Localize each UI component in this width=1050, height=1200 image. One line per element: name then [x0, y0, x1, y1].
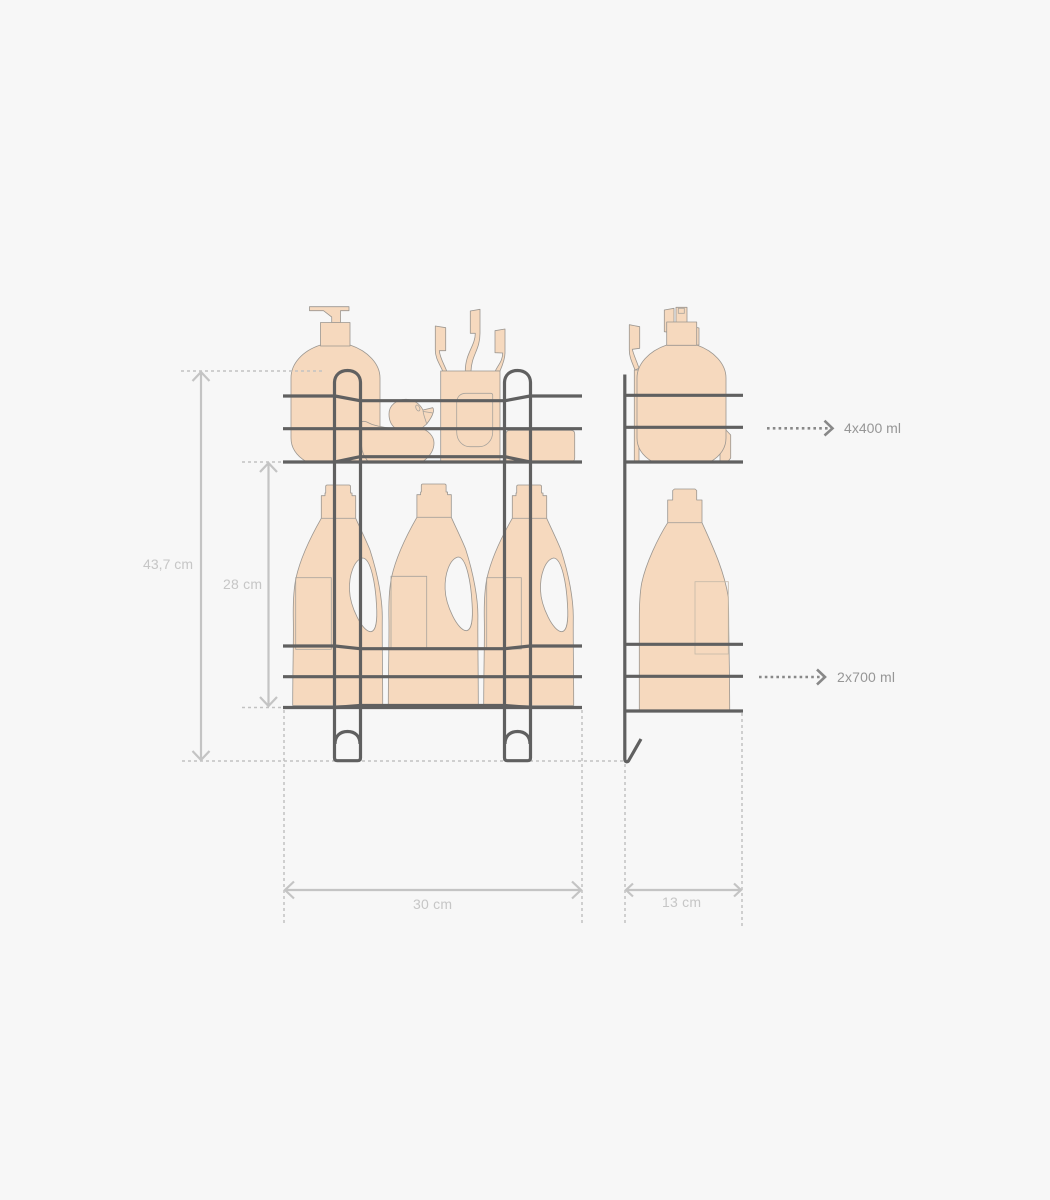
front view items: large bottles on lower shelf: [293, 484, 574, 706]
icon: rubber duck: [362, 399, 434, 462]
front view: wire rack: [283, 370, 582, 761]
icon: side view bottle: [639, 489, 730, 711]
dimension guides: dashed extension lines: [182, 462, 742, 929]
dimension: shelf spacing 28 cm: [223, 463, 277, 706]
left upright: [334, 370, 360, 761]
dimension: shelf spacing 28 cm: 28 cm: [223, 576, 262, 592]
callout: 2x700 ml capacity: 2x700 ml: [837, 669, 895, 685]
icon: bottle left: [293, 485, 383, 706]
front view items: products on top shelf: [291, 307, 575, 462]
icon: bottle middle: [388, 484, 478, 706]
right upright: [504, 370, 530, 761]
side view items: products: [629, 307, 731, 711]
icon: soap pump bottle: [291, 307, 380, 462]
dimension: depth 13 cm: 13 cm: [662, 894, 701, 910]
height guide over soap bottle: [181, 370, 325, 372]
icon: soap bar: [506, 430, 575, 462]
callout: 4x400 ml capacity: [767, 420, 901, 436]
dimension: overall height 43,7 cm: 43,7 cm: [143, 556, 193, 572]
callout: 2x700 ml capacity: [759, 669, 895, 685]
side view: wire rack: [625, 374, 743, 762]
dimension: width 30 cm: 30 cm: [413, 896, 452, 912]
dimension: width 30 cm: [285, 882, 581, 912]
callout: 4x400 ml capacity: 4x400 ml: [844, 420, 901, 436]
dimension: overall height 43,7 cm: [143, 372, 210, 760]
icon: toothbrushes in cup: [435, 309, 505, 462]
icon: bottle right: [484, 485, 574, 706]
shelf wires: [283, 396, 582, 708]
icon: side view top shelf items: [629, 307, 731, 462]
dimension: depth 13 cm: [626, 884, 741, 910]
